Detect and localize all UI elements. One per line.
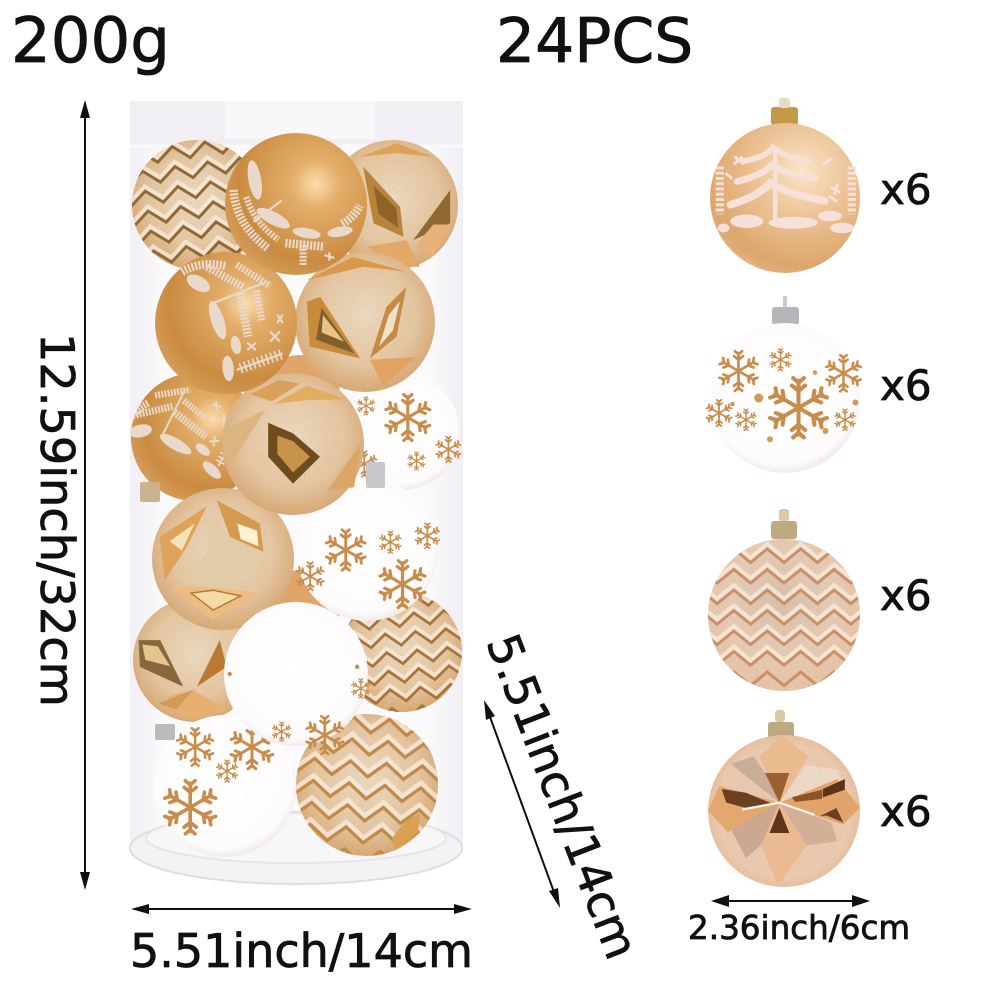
bauble row 1: facet [328, 140, 458, 270]
count 1: x6 [880, 165, 932, 214]
ornament width arrow [711, 895, 870, 907]
bauble row 5: chevron [348, 596, 462, 712]
quantity label: 24PCS [496, 5, 693, 77]
bauble row 5: white [224, 602, 370, 754]
tube body [130, 101, 463, 884]
bauble row 4: facet star [152, 488, 294, 630]
bauble row 1: chevron [132, 140, 243, 268]
bauble row 2: facet [295, 252, 435, 392]
ball [708, 539, 860, 691]
height label: 12.59inch/32cm [30, 333, 84, 707]
ball [706, 323, 861, 473]
ornament width label: 2.36inch/6cm [688, 909, 910, 947]
cap [772, 296, 799, 325]
bauble row 3: facet kite [222, 373, 364, 515]
cap [771, 98, 798, 125]
ball [708, 735, 860, 887]
hidden back baubles [260, 355, 435, 810]
count 2: x6 [880, 361, 932, 410]
height arrow [80, 100, 90, 890]
bauble row 4: snow [296, 479, 440, 621]
bauble row 6: snow [154, 715, 296, 857]
ornament 4: faceted glitter [708, 710, 860, 887]
bauble row 5: facet [133, 598, 257, 722]
weight label: 200g [11, 4, 170, 77]
bauble row 2: matte spray [155, 252, 297, 394]
count 4: x6 [880, 787, 932, 836]
ornament 1: rose gold tree [710, 98, 860, 273]
hanging caps in tube [140, 462, 385, 740]
bauble row 6: chevron [296, 714, 438, 856]
cap [771, 509, 797, 539]
bauble row 1: matte spray [225, 133, 367, 275]
bauble row 3: matte spray [131, 375, 242, 500]
tube width arrow [131, 904, 472, 914]
ball [710, 123, 860, 273]
bauble row 3: snow [344, 374, 461, 490]
ornament 3: chevron glitter [708, 509, 860, 691]
depth label: 5.51inch/14cm [476, 627, 649, 966]
tube width label: 5.51inch/14cm [130, 924, 473, 978]
transparent tube with baubles [129, 101, 463, 885]
depth arrow [484, 700, 560, 908]
ornament 2: white snowflake [706, 296, 861, 473]
count 3: x6 [880, 571, 932, 620]
cap [768, 710, 794, 740]
